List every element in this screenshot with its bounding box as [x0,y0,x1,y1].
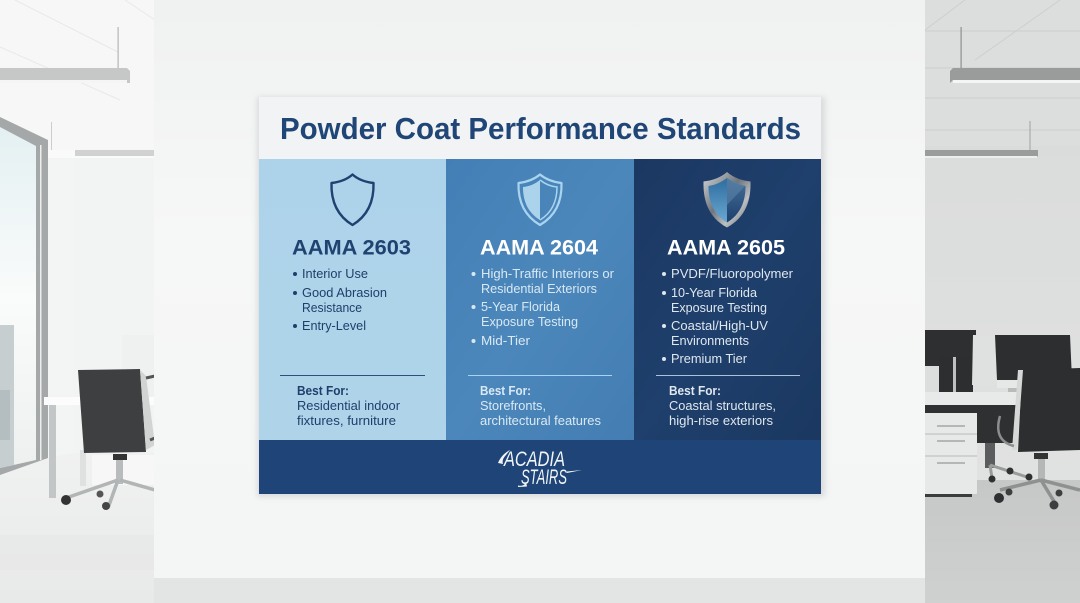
best for: AAMA 2604 [480,384,601,428]
best for: AAMA 2604: architectural features [480,414,601,428]
list: AAMA 2605 features: Exposure Testing [671,300,767,315]
right office scene [925,0,1080,603]
best for: AAMA 2603 [297,384,400,428]
icon: outline shield [331,174,374,225]
best for: AAMA 2603: Best For: [297,384,349,398]
ceiling lights left [0,27,155,158]
list: AAMA 2604 features: High-Traffic Interiors or [481,266,615,281]
office chair left [61,369,155,510]
list: AAMA 2605 features: PVDF/Fluoropolymer [671,266,794,281]
list: AAMA 2604 features: 5-Year Florida [481,299,561,314]
list: AAMA 2603 features: Entry-Level [302,318,366,333]
left office scene [0,0,155,603]
poster [257,97,825,497]
title: Powder Coat Performance Standards [280,111,801,146]
window [0,117,48,475]
heading: AAMA 2605: AAMA 2605 [667,236,785,260]
desk with drawers [925,392,1032,497]
list: AAMA 2605 features: 10-Year Florida [671,285,758,300]
list: AAMA 2603 features: Interior Use [302,266,368,281]
ceiling lights right [925,27,1080,158]
monitors [925,330,1072,395]
list: AAMA 2605 features: Premium Tier [671,351,748,366]
best for: AAMA 2605: high-rise exteriors [669,414,773,428]
logo: Acadia Stairs [498,448,582,489]
best for: AAMA 2603: Residential indoor [297,399,400,413]
best for: AAMA 2605: Coastal structures, [669,399,776,413]
list: AAMA 2603 features [293,266,387,333]
list: AAMA 2604 features: Residential Exteriors [481,281,597,296]
logo: Acadia Stairs: ACADIA [502,448,565,471]
list: AAMA 2604 features: Mid-Tier [481,333,531,348]
list: AAMA 2605 features: Coastal/High-UV [671,318,768,333]
best for: AAMA 2604: Storefronts, [480,399,546,413]
panel: AAMA 2604 [446,159,634,440]
list: AAMA 2605 features: Environments [671,333,749,348]
heading: AAMA 2604: AAMA 2604 [480,236,598,260]
logo: Acadia Stairs: STAIRS [521,466,567,489]
list: AAMA 2604 features: Exposure Testing [481,314,578,329]
panel: AAMA 2605 [634,159,821,440]
footer band [259,440,821,494]
icon: half-filled shield [518,174,562,225]
heading: AAMA 2603: AAMA 2603 [292,236,411,260]
feature wall [154,0,925,603]
best for: AAMA 2604: Best For: [480,384,531,398]
list: AAMA 2603 features: Resistance [302,300,362,315]
list: AAMA 2604 features [472,266,615,348]
best for: AAMA 2605: Best For: [669,384,721,398]
desk and monitor [44,335,155,498]
best for: AAMA 2605 [669,384,776,428]
icon: metallic shield [703,172,751,228]
list: AAMA 2603 features: Good Abrasion [302,285,387,300]
office chair right [994,368,1080,510]
panel: AAMA 2603 [259,159,446,440]
list: AAMA 2605 features [662,266,794,366]
best for: AAMA 2603: fixtures, furniture [297,414,396,428]
